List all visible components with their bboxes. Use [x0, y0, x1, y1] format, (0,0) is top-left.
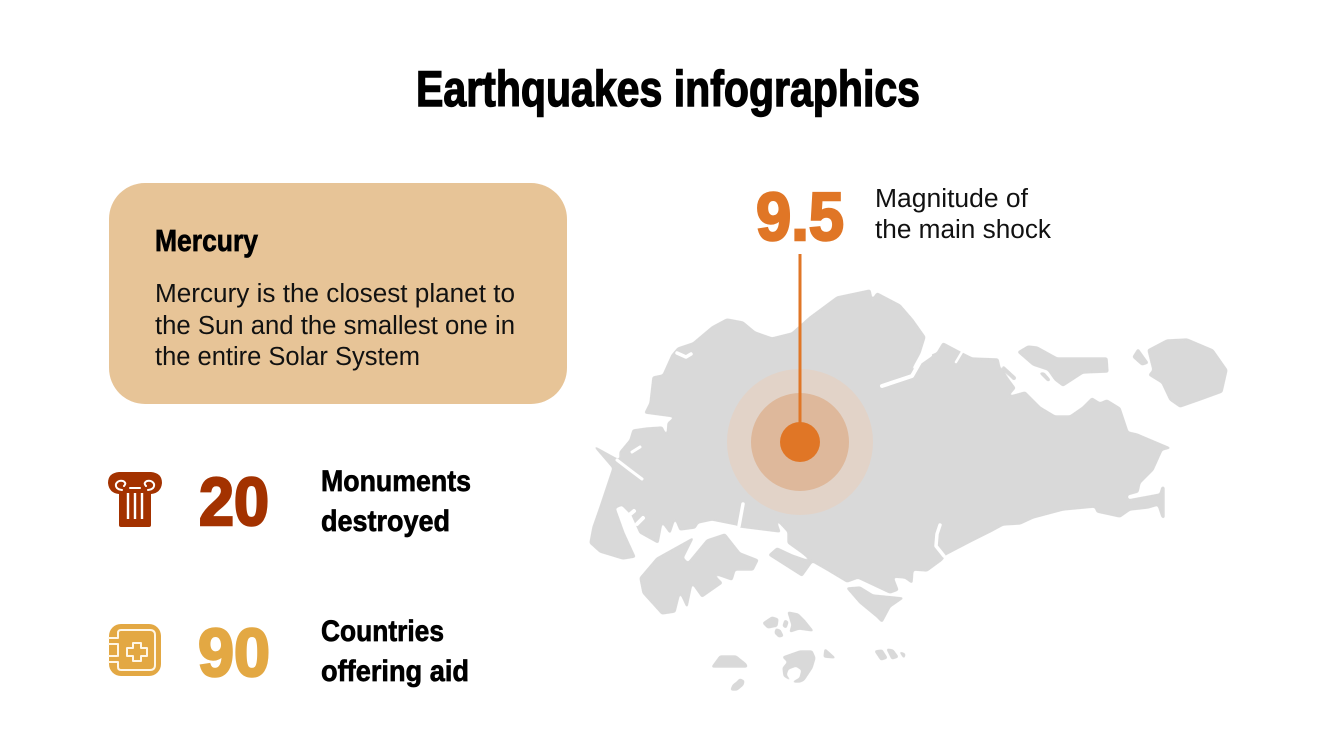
card body text: the entire Solar System — [155, 343, 420, 371]
stat number: 20: 20 — [199, 464, 269, 540]
stat number: 90: 90 — [198, 615, 270, 691]
icon: column — [108, 472, 162, 527]
map creeks — [617, 352, 962, 556]
stat label: countries offering aid: Countries — [321, 615, 444, 648]
magnitude label: the main shock — [875, 216, 1051, 244]
icon: medical book — [109, 624, 161, 676]
card body text — [155, 280, 515, 371]
stat label: monuments destroyed: Monuments — [321, 465, 471, 498]
card body text: the Sun and the smallest one in — [155, 312, 515, 340]
stat label: monuments destroyed — [321, 465, 471, 538]
epicentre line — [798, 254, 802, 434]
title: Earthquakes infographics — [416, 61, 920, 117]
stat label: countries offering aid — [321, 615, 469, 688]
stat number: 9.5: 9.5 — [756, 179, 844, 255]
card heading: Mercury — [155, 223, 259, 258]
map of Singapore — [590, 290, 1227, 690]
stat label: monuments destroyed: destroyed — [321, 505, 450, 538]
Pulau Tekong — [1148, 339, 1227, 407]
Pulau Ubin — [1018, 346, 1108, 386]
magnitude label: Magnitude of — [875, 185, 1029, 213]
panel: Mercury card — [109, 183, 567, 404]
stat label: countries offering aid: offering aid — [321, 655, 469, 688]
Jurong island — [640, 534, 758, 614]
epicentre rings — [727, 254, 873, 515]
southern islets — [769, 548, 812, 576]
magnitude label — [875, 185, 1051, 244]
epicentre dot — [780, 422, 820, 462]
card body text: Mercury is the closest planet to — [155, 280, 515, 308]
main island — [590, 290, 1170, 593]
